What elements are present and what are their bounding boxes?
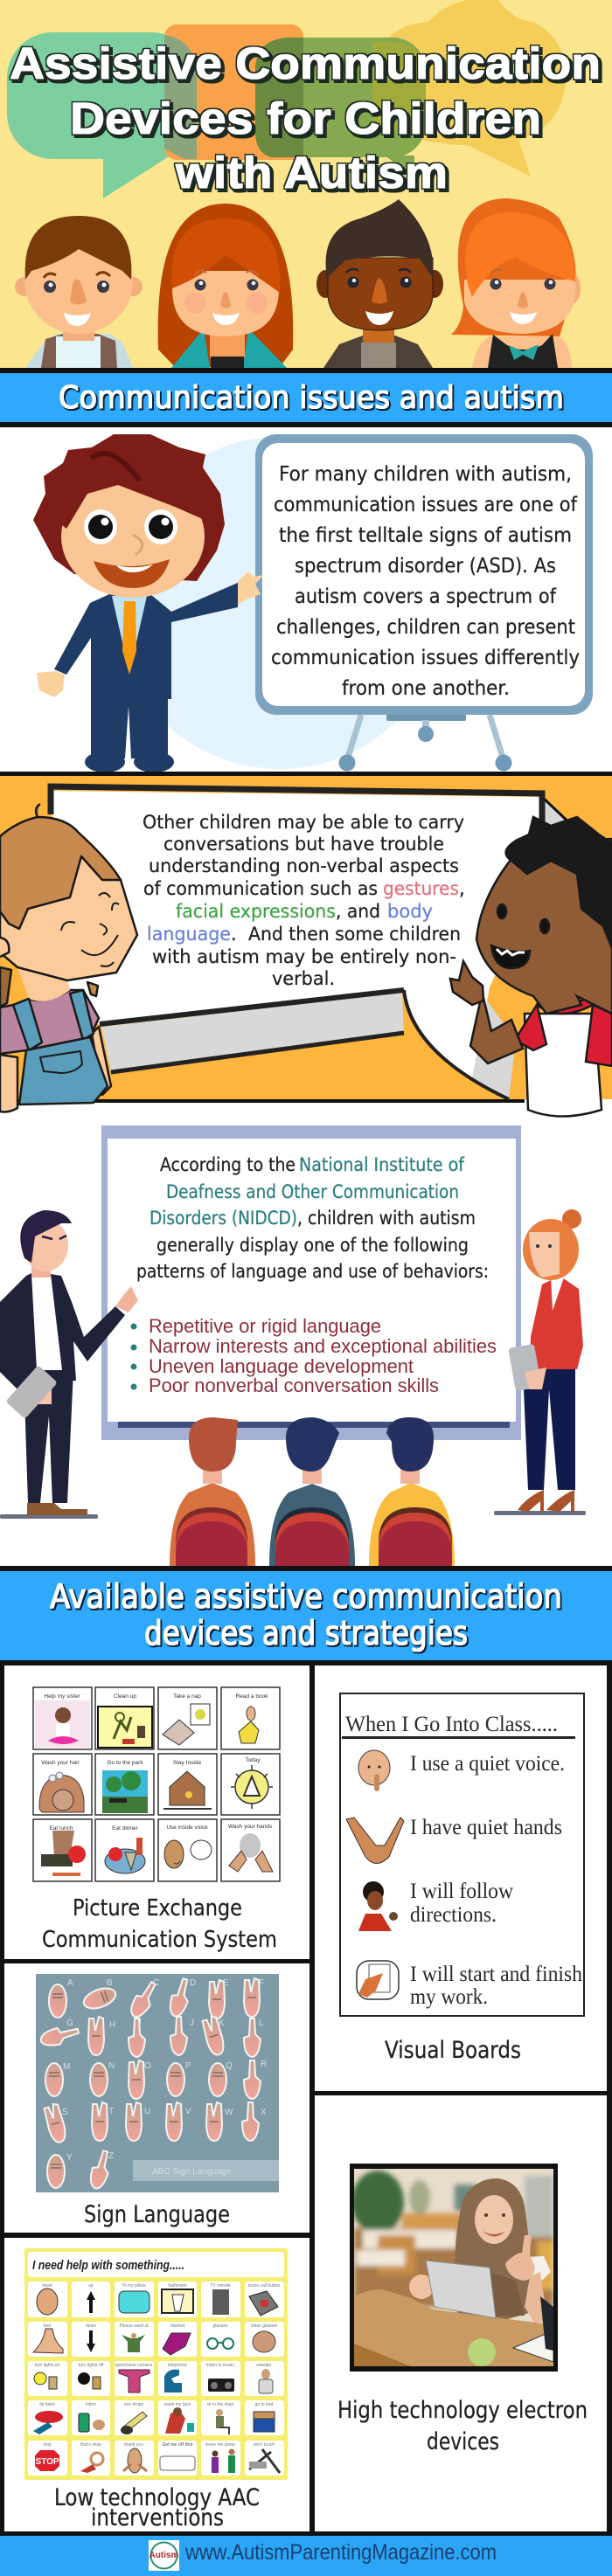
caption: high technology: devices [427,2428,499,2455]
screen text: According to the [160,1154,296,1175]
AAC row 4: lotion [86,2402,96,2407]
AAC row 2: Please wash & [119,2323,149,2329]
board text: communication issues are one of [274,494,578,516]
character: girl with red hair [158,204,293,368]
letter labels: F [259,1978,264,1988]
card: wash your hands [221,1819,280,1881]
AAC row 3: turn lights off [79,2363,104,2368]
board frame [255,434,593,715]
board surface [262,443,585,706]
footer logo: Autism [150,2551,179,2560]
board text: challenges, children can present [276,616,575,639]
AAC row 5: leave me alone [205,2442,235,2448]
bullet list: Repetitive or rigid language [149,1315,381,1337]
letter labels: W [225,2108,233,2117]
screen text: generally display one of the following [156,1235,469,1256]
AAC row 4: wash my face [164,2402,191,2407]
board text [271,463,580,700]
board text: communication issues differently [271,647,580,669]
card: today: Today [245,1757,261,1763]
character: boy waving [450,817,612,1117]
paper text: facial expressions [176,901,336,922]
letter labels: H [109,2020,115,2030]
bullet list: Uneven language development [149,1355,414,1377]
AAC row 3: sweater [256,2363,272,2368]
panel: presentation scene [0,1125,612,1566]
card: wash your hair: Wash your hair [41,1760,80,1766]
AAC row 1: To my pillow [122,2283,146,2289]
card: read a book: Read a book [236,1693,268,1700]
card: stay inside: Stay Inside [173,1760,201,1766]
letter labels: D [190,1978,196,1988]
AAC row 4: go to bed [255,2402,274,2407]
card: help my sister [33,1687,92,1749]
title: with Autism [175,148,448,197]
card: help my sister: Help my sister [44,1693,80,1700]
caption: low technology AAC: Low technology AAC [54,2484,260,2511]
visual schedule board: I will follow [410,1880,513,1903]
AAC row 3: telephone [168,2363,187,2368]
card: wash your hair [33,1754,92,1815]
board text: from one another. [342,677,510,700]
letter labels [62,1978,267,2163]
visual schedule board [340,1693,584,2016]
letter labels: J [190,2019,194,2028]
letter labels: L [259,2019,264,2028]
paper text: verbal. [272,968,335,989]
character: girl in overalls [0,804,137,1111]
icon: writing on paper [357,1961,399,1999]
website URL: www.AutismParentingMagazine.com [184,2540,497,2565]
paper text [143,812,465,989]
character: girl with orange hair [451,198,581,368]
letter labels: I [139,2017,142,2026]
AAC row 5: don't touch [254,2442,275,2448]
paper text: , [459,878,465,899]
AAC row 1 [28,2282,284,2317]
letter labels: U [144,2107,150,2116]
panel: teacher and board [0,427,612,772]
banner: available devices and strategies [0,1566,612,1665]
footer [0,2536,612,2576]
card: go to the park [95,1754,154,1815]
caption: high technology [337,2397,588,2455]
banner: communication issues and autism [0,368,612,427]
audience member 3 [369,1417,455,1566]
letter labels: S [62,2108,68,2117]
bullet list: Narrow interests and exceptional abilities [149,1335,497,1357]
visual schedule board: I will start and finish [410,1963,582,1986]
screen text: , children with autism [297,1208,476,1229]
paper text: body [387,901,433,922]
AAC row 2: clean glasses [251,2323,278,2329]
screen tray [118,1422,510,1428]
letter labels: X [261,2108,267,2117]
card: wash your hands: Wash your hands [228,1824,273,1830]
AAC row 4: eye drops [124,2402,143,2407]
panel: visual boards [315,1665,607,2091]
letter labels: K [219,2019,225,2028]
letter labels: R [261,2060,267,2069]
AAC row 2: down [86,2323,96,2329]
panel: sign language [4,1963,309,2233]
AAC row 4: sit in the chair [207,2402,234,2407]
letter labels: A [67,1978,73,1988]
paper text: language [147,924,231,945]
AAC communication board: I need help with something..... [32,2258,184,2273]
character: boy [15,216,143,368]
icon: folded hands [346,1818,404,1863]
card: clean up [95,1687,154,1749]
projection screen frame [101,1125,521,1440]
panel: picture exchange communication system [4,1665,309,1959]
letter labels: B [107,1978,113,1988]
AAC row 2: blanket [170,2323,185,2329]
letter labels: V [185,2107,191,2116]
visual schedule board: When I Go Into Class..... [345,1713,558,1736]
AAC row 5: Get me off this [162,2442,193,2448]
visual schedule board: I have quiet hands [410,1816,562,1839]
AAC row 1: up [88,2283,94,2289]
banner: available devices and strategies: devices and strategies [144,1614,468,1652]
caption: visual boards: Visual Boards [385,2037,521,2064]
card: read a book [221,1687,280,1749]
title: Assistive Communication [10,38,601,88]
panel: low technology AAC [4,2238,309,2531]
panel: high technology devices [315,2095,607,2531]
AAC row 2: feet [44,2323,52,2329]
letter labels: E [223,1978,229,1988]
character: teacher [33,434,264,772]
card: stay inside [158,1754,217,1815]
paper text: Other children may be able to carry [143,812,464,833]
AAC row 4: lip balm [39,2402,55,2407]
audience member 1 [170,1417,255,1566]
bullet list [131,1315,497,1396]
paper text: with autism may be entirely non- [152,946,456,967]
screen text: patterns of language and use of behaviors: [136,1261,489,1282]
chart label: ABC Sign Language [152,2167,232,2177]
card: eat lunch: Eat lunch [49,1825,73,1832]
title [10,38,601,197]
letter labels: T [108,2107,114,2116]
board text: autism covers a spectrum of [295,585,557,608]
caption: picture exchange [42,1895,277,1953]
AAC row 3: listen to music [206,2363,234,2368]
header background [0,0,612,368]
paper text: of communication such as [143,878,378,899]
AAC row 4 [28,2400,284,2435]
card: eat lunch [33,1819,92,1881]
AAC row 5 [28,2441,284,2476]
AAC row 1: TV remote [210,2283,231,2289]
letter labels: Q [226,2061,233,2071]
letter labels: C [153,1978,159,1988]
AAC row 1: bathroom [168,2283,187,2289]
letter labels: Y [66,2153,73,2163]
paper text: gestures [383,878,459,899]
AAC row 5: stop [43,2442,52,2448]
board text: spectrum disorder (ASD). As [295,555,556,578]
caption: picture exchange: Picture Exchange [73,1895,242,1922]
character: male presenter [0,1210,138,1519]
title: Devices for Children [70,93,541,143]
AAC communication board [24,2248,288,2480]
screen surface [108,1139,516,1422]
caption: low technology AAC: interventions [91,2504,224,2531]
card: take a nap: Take a nap [173,1693,201,1700]
visual schedule board: my work. [410,1985,488,2009]
paper text: , and [336,901,380,922]
AAC row 5: thank you [124,2442,143,2448]
character: boy with dark hair [316,199,443,368]
AAC row 5: that's okay [80,2442,101,2448]
AAC row 1: head [42,2283,52,2289]
icon: quiet face [358,1750,390,1791]
paper text: understanding non-verbal aspects [149,855,459,876]
panel: children with paper sign [0,772,612,1125]
board text: For many children with autism, [279,463,572,486]
easel stand [339,713,512,771]
paper text: conversations but have trouble [163,834,444,855]
panel grid backing [0,1665,612,2536]
sign language alphabet chart [36,1974,279,2192]
paper text: . [231,924,237,945]
card: clean up: Clean up [114,1693,136,1700]
caption: sign language: Sign Language [84,2201,230,2228]
board text: the first telltale signs of autism [279,524,572,547]
audience [170,1417,455,1566]
footer logo [149,2540,179,2571]
letter labels: G [66,2019,73,2028]
audience member 2 [269,1417,355,1566]
letter labels: P [185,2061,191,2071]
paper text: And then some children [248,924,461,945]
AAC row 3 [28,2361,284,2396]
caption: picture exchange: Communication System [42,1927,277,1953]
card: today [221,1754,280,1815]
screen text: Disorders (NIDCD) [150,1208,297,1229]
AAC row 2 [28,2322,284,2357]
photo: girl with tablet [350,2164,558,2372]
icon: person following directions [358,1881,398,1931]
letter labels: Z [108,2151,114,2161]
card: eat dinner: Eat dinner [112,1825,139,1832]
card: eat dinner [95,1819,154,1881]
AAC row 3: turn lights on [35,2363,60,2368]
card: use inside voice [158,1819,217,1881]
AAC row 2: glasses [213,2323,228,2329]
AAC row 1: nurse call button [248,2283,281,2289]
caption: low technology AAC [54,2484,260,2531]
banner: communication issues and autism: Communication issues and autism [59,380,564,416]
visual schedule board: I use a quiet voice. [410,1752,565,1776]
chart label [133,2160,279,2181]
visual schedule board: directions. [410,1903,497,1927]
letter labels: O [144,2061,151,2071]
card: use inside voice: Use inside voice [166,1825,208,1831]
AAC row 3: open/close curtains [115,2363,153,2368]
card: go to the park: Go to the park [107,1760,143,1766]
screen text: Deafness and Other Communication [166,1181,459,1202]
picture cards [33,1687,280,1881]
banner: available devices and strategies: Available assistive communication [50,1577,562,1616]
bullet list: Poor nonverbal conversation skills [149,1375,439,1396]
screen text: National Institute of [299,1154,465,1175]
screen text [136,1154,489,1282]
letter labels: M [63,2062,70,2072]
speech bubbles [7,0,566,198]
paper sign [51,786,577,1099]
character: female presenter [494,1209,586,1515]
card: take a nap [158,1687,217,1749]
AAC row 5: STOP [35,2457,59,2467]
letter labels: N [108,2061,115,2071]
